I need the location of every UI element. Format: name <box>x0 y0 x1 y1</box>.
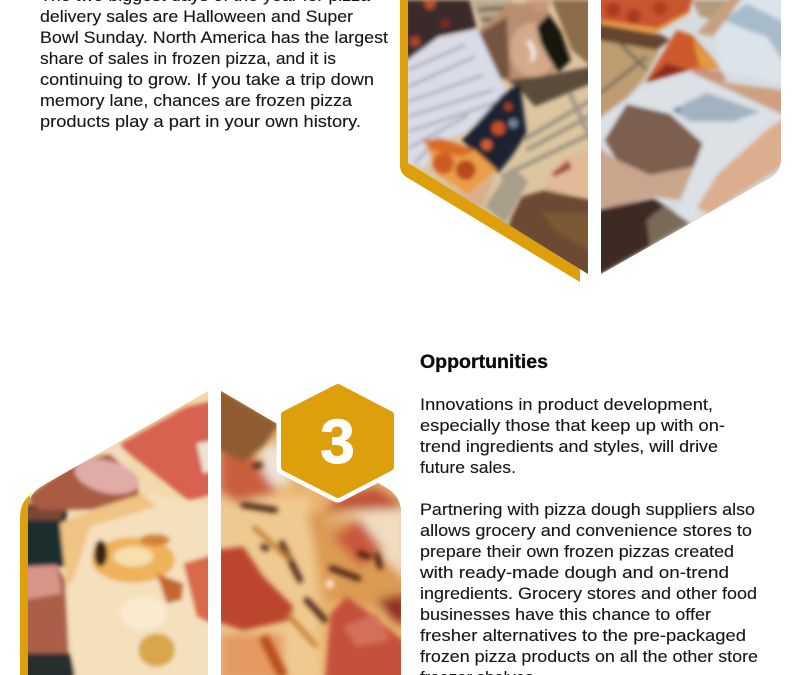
cream band <box>318 508 407 580</box>
text block: partnering paragraph: prepare their own frozen pizzas created <box>420 542 734 561</box>
salami right <box>182 553 208 626</box>
text block: innovations paragraph: future sales. <box>420 458 516 477</box>
salami left <box>217 547 293 631</box>
text block: partnering paragraph: ingredients. Grocery stores and other food <box>420 584 757 603</box>
text block: innovations paragraph <box>420 395 725 477</box>
text block: frozen pizza sales: continuing to grow. If you take a trip down <box>40 70 374 89</box>
text block: partnering paragraph <box>419 500 758 675</box>
photo: pizza close-up <box>217 387 407 675</box>
dark floral shirt top <box>405 0 477 63</box>
text block: frozen pizza sales: products play a part in your own history. <box>40 112 361 131</box>
icon: number 3 hexagon badge <box>285 388 390 494</box>
shirt <box>597 72 787 223</box>
hand <box>690 68 727 91</box>
woman's hair <box>508 190 592 277</box>
text block: innovations paragraph: especially those that keep up with on- <box>420 416 725 435</box>
panel: gold accent of the top hexagon <box>400 0 580 282</box>
icon: number 3 hexagon badge: 3 <box>320 408 355 477</box>
text block: partnering paragraph: allows grocery and convenience stores to <box>420 521 752 540</box>
text block: partnering paragraph: frozen pizza products on all the other store <box>420 647 758 666</box>
photo: hand holding pizza slice <box>28 391 208 675</box>
blanket plaid <box>472 0 592 223</box>
upper arm <box>718 80 781 116</box>
text block: frozen pizza sales: Bowl Sunday. North America has the largest <box>40 28 388 47</box>
text block: frozen pizza sales: delivery sales are Halloween and Super <box>40 7 354 26</box>
denim top right <box>714 0 781 72</box>
cardboard top <box>217 387 280 462</box>
sunglasses <box>537 14 571 73</box>
woman's face <box>545 148 592 197</box>
crust <box>60 492 217 675</box>
text block: frozen pizza sales <box>40 0 388 131</box>
brown background and dark gap <box>23 503 67 567</box>
neck and face <box>475 3 572 80</box>
heading: Opportunities: Opportunities <box>420 352 548 373</box>
striped shirt <box>405 29 508 168</box>
pizza on box <box>597 0 693 33</box>
grill marks <box>243 465 380 620</box>
text block: frozen pizza sales: memory lane, chances are frozen pizza <box>40 91 353 110</box>
photo: couple on picnic blanket, left half <box>408 0 588 274</box>
golden lower crust <box>138 633 175 667</box>
cheese base <box>217 493 323 675</box>
panel: gold accent of the bottom hexagon <box>20 494 32 675</box>
arm to slice <box>697 0 743 37</box>
text block: innovations paragraph: Innovations in product development, <box>420 395 713 414</box>
hair and blanket <box>601 196 683 274</box>
red meat right <box>323 487 407 510</box>
thumb <box>27 454 138 510</box>
melted cheese burn <box>92 537 175 583</box>
hair of man <box>552 0 592 67</box>
text block: partnering paragraph: fresher alternatives to the pre-packaged <box>420 626 746 645</box>
text block: partnering paragraph: Partnering with pizza dough suppliers also <box>420 500 755 519</box>
lower fingers <box>23 565 68 657</box>
chest shadow <box>605 104 703 175</box>
text block: partnering paragraph: with ready-made dough and on-trend <box>419 563 729 582</box>
lower arm <box>697 117 787 213</box>
floral shirt middle <box>462 83 527 173</box>
text block: partnering paragraph: businesses have this chance to offer <box>420 605 711 624</box>
text block: frozen pizza sales: share of sales in frozen pizza, and it is <box>40 49 336 68</box>
salami bottom right <box>325 597 407 675</box>
salami top <box>118 400 217 501</box>
photo: couple on picnic blanket, right half <box>601 0 781 274</box>
hand holding pizza <box>443 175 495 208</box>
shadow under chin <box>507 67 592 107</box>
plaid blanket <box>597 40 660 120</box>
text block: innovations paragraph: trend ingredients and styles, will drive <box>420 437 718 456</box>
pizza slice <box>645 30 721 83</box>
hand at top <box>526 0 552 12</box>
pizza box <box>597 23 670 50</box>
pizza slice <box>423 138 497 195</box>
